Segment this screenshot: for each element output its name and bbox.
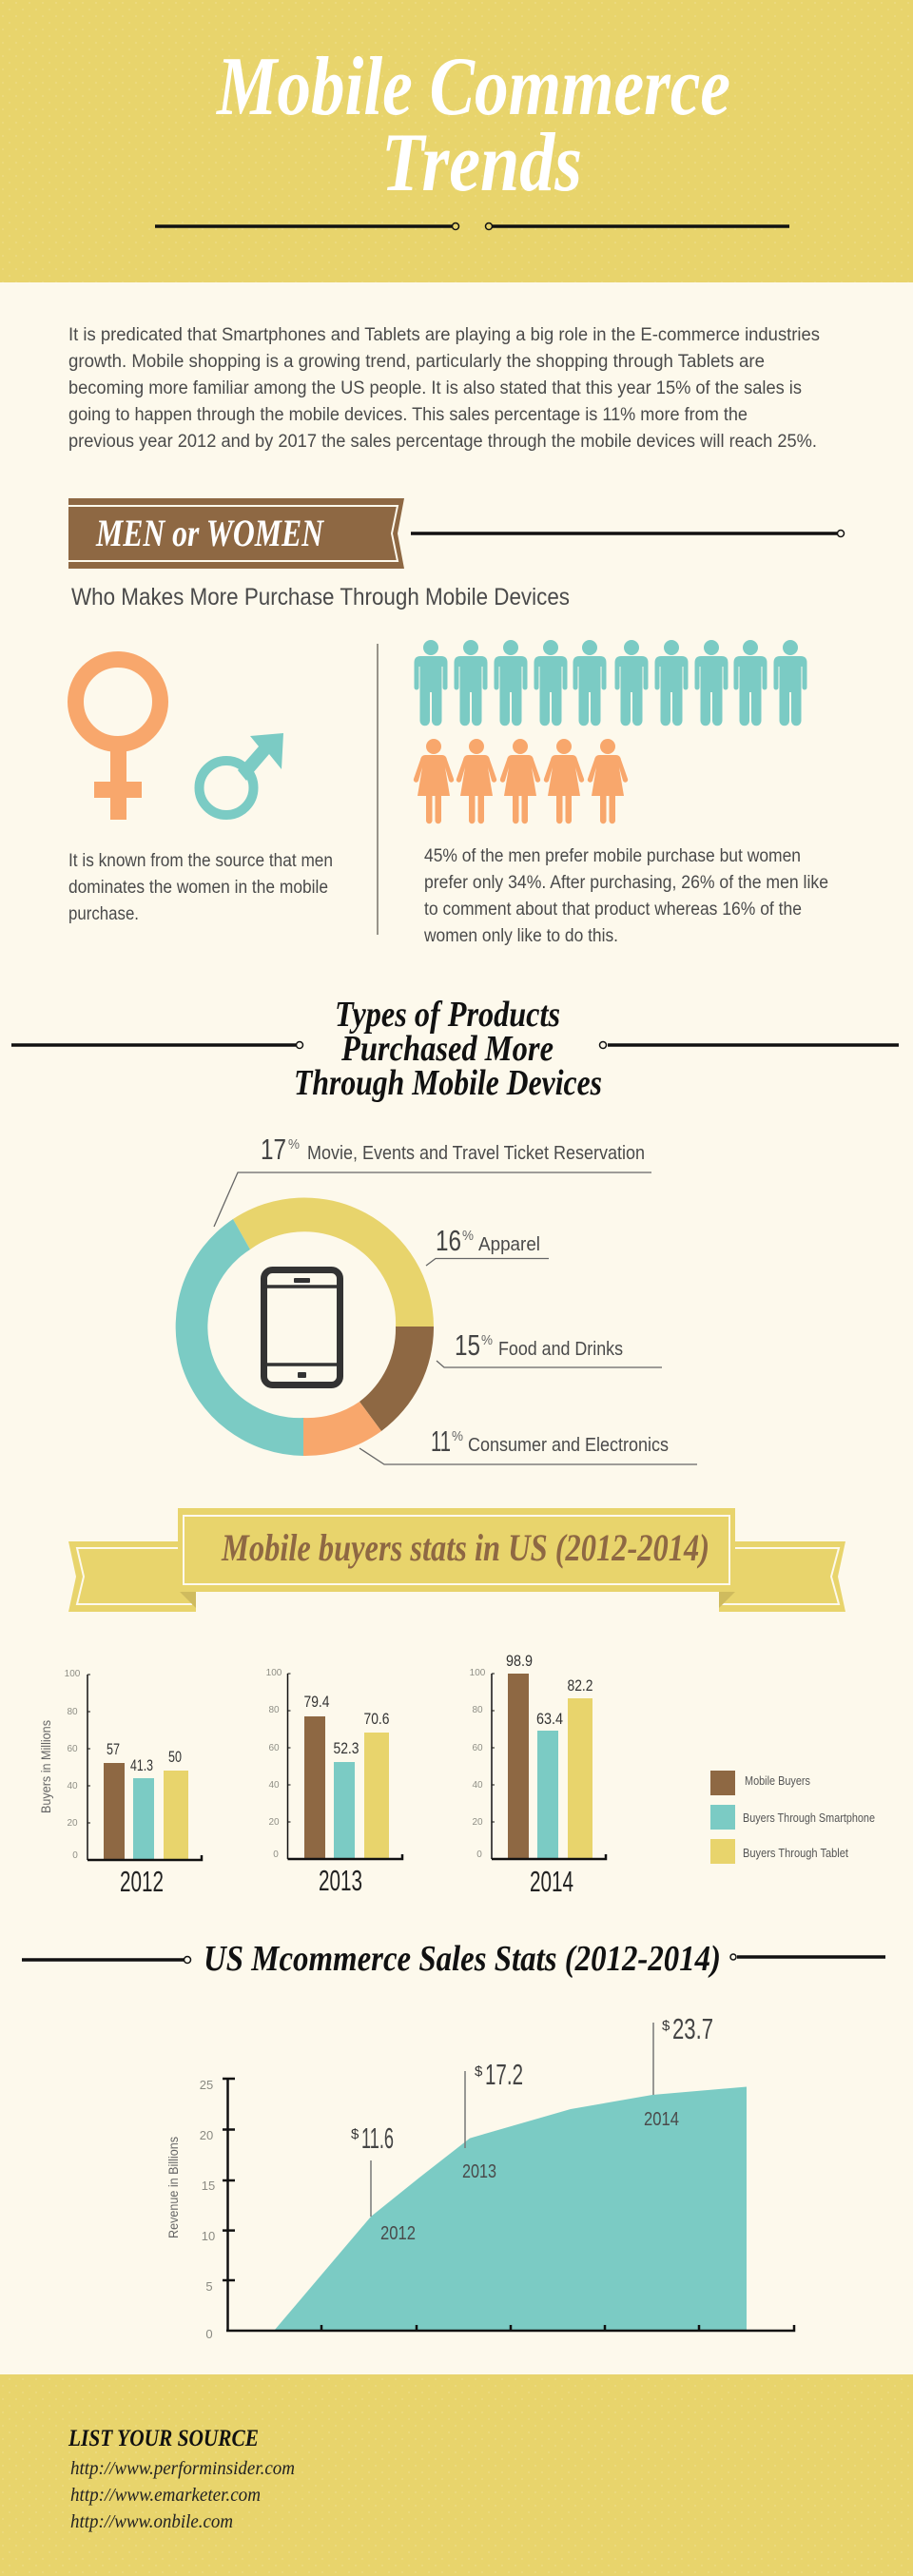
callout: 15 percent: 15	[455, 1328, 480, 1362]
intro paragraph: It is predicated that Smartphones and Tablets are playing a big role in the E-commerce industries	[68, 325, 820, 345]
bar chart: 2014: 82.2	[567, 1676, 593, 1695]
text: men dominate: It is known from the source that men	[68, 851, 333, 871]
area chart: 0	[205, 2327, 213, 2341]
heading dividers	[11, 1042, 899, 1048]
banner: men or women	[68, 498, 404, 569]
callout: 11 percent: 11	[431, 1424, 451, 1458]
text: preference percentages: prefer only 34%. After purchasing, 26% of the men like	[424, 873, 828, 893]
text: preference percentages: 45% of the men prefer mobile purchase but women	[424, 846, 801, 866]
callout: 16 percent: Apparel	[478, 1234, 540, 1255]
callout: 2012 revenue: $	[351, 2126, 359, 2142]
callout: 16 percent: %	[462, 1228, 474, 1244]
heading: types of products	[294, 995, 602, 1103]
bar chart: 2014: 100	[470, 1668, 486, 1678]
intro paragraph: previous year 2012 and by 2017 the sales percentage through the mobile devices will reach 25%.	[68, 432, 817, 452]
bar chart: 2012: 100	[65, 1669, 81, 1679]
callout: 16 percent: 16	[436, 1224, 461, 1257]
panel: us mcommerce sales	[22, 1939, 885, 2341]
bar chart: 2014: 0	[476, 1850, 482, 1860]
axis label: revenue: Revenue in Billions	[165, 2137, 181, 2238]
callout: 11 percent	[359, 1424, 697, 1464]
bar chart: 2012: 2012	[120, 1865, 164, 1898]
header divider	[155, 223, 789, 230]
callout: 2013 revenue: $	[475, 2063, 483, 2080]
callout: 2014 revenue	[644, 2012, 713, 2130]
area chart: 25	[200, 2078, 213, 2092]
icon: men pictogram row	[415, 640, 806, 726]
callout: 2013 revenue: 2013	[462, 2161, 496, 2182]
icon: female symbol	[76, 660, 160, 820]
title	[215, 41, 730, 209]
bar chart: 2013: 52.3	[333, 1739, 359, 1757]
callout: 2012 revenue: 11.6	[361, 2121, 394, 2155]
heading: types of products: Purchased More	[340, 1029, 554, 1069]
bar chart: 2014: 20	[472, 1817, 483, 1828]
heading: sales stats: US Mcommerce Sales Stats (2012-2014)	[204, 1939, 721, 1979]
callout: 2013 revenue: 17.2	[485, 2058, 523, 2091]
callout: 2014 revenue: 2014	[644, 2109, 679, 2130]
source links	[70, 2458, 295, 2532]
subheading: Who Makes More Purchase Through Mobile Devices	[71, 584, 570, 610]
bar chart: 2013: 60	[268, 1743, 280, 1753]
panel: types of products	[11, 995, 899, 1464]
bar chart: 2013: 2013	[319, 1864, 362, 1897]
callout: 17 percent	[214, 1133, 651, 1227]
icon: smartphone	[263, 1270, 340, 1385]
text: preference percentages: women only like to do this.	[423, 926, 618, 946]
text: preference percentages: to comment about that product whereas 16% of the	[424, 900, 802, 920]
callout: 15 percent: Food and Drinks	[498, 1339, 623, 1360]
callout: 15 percent: %	[481, 1332, 493, 1348]
callout: 16 percent	[426, 1224, 549, 1266]
heading: types of products: Through Mobile Devices	[294, 1063, 602, 1103]
banner divider	[411, 531, 845, 536]
area chart: 15	[202, 2179, 215, 2193]
icon: male symbol	[200, 733, 283, 815]
title: Mobile Commerce	[215, 41, 730, 133]
bar chart: 2013: 80	[268, 1705, 280, 1715]
intro paragraph: becoming more familiar among the US people. It is also stated that this year 15% of the sales is	[68, 378, 802, 398]
heading: types of products: Types of Products	[335, 995, 560, 1035]
bar chart: 2012: 40	[67, 1781, 78, 1792]
bar chart: 2012: 80	[67, 1707, 78, 1717]
callout: 17 percent: %	[288, 1136, 300, 1152]
callout: 11 percent: %	[452, 1428, 463, 1444]
bar chart: 2014	[470, 1652, 606, 1898]
panel: header	[0, 0, 913, 282]
bar chart: 2014: 60	[472, 1743, 483, 1753]
ribbon banner	[68, 1508, 845, 1612]
text: men dominate	[68, 851, 333, 924]
legend: Mobile Buyers	[745, 1773, 810, 1788]
area chart: 10	[202, 2229, 215, 2243]
bar chart: 2013: 70.6	[363, 1710, 390, 1728]
legend	[710, 1771, 875, 1864]
callout: 17 percent: 17	[261, 1133, 286, 1166]
area chart: 5	[205, 2279, 213, 2294]
legend: Buyers Through Tablet	[743, 1846, 848, 1860]
heading dividers	[22, 1954, 885, 1963]
intro paragraph: going to happen through the mobile devices. This sales percentage is 11% more from the	[68, 405, 748, 425]
bar chart: 2012: 50	[168, 1748, 182, 1766]
area chart	[165, 2012, 794, 2341]
bar chart: 2014: 98.9	[506, 1652, 533, 1670]
panel: mobile buyers stats	[38, 1508, 875, 1898]
text: men dominate: dominates the women in the mobile	[68, 878, 328, 898]
bar chart: 2012: 41.3	[130, 1756, 153, 1774]
panel: footer sources	[0, 2374, 913, 2576]
heading: list your source: LIST YOUR SOURCE	[68, 2426, 259, 2451]
title: Trends	[381, 117, 582, 209]
intro paragraph	[68, 325, 820, 452]
bar chart: 2014: 63.4	[536, 1710, 563, 1728]
source links: http://www.onbile.com	[70, 2511, 233, 2532]
callout: 2012 revenue	[351, 2121, 416, 2244]
bar chart: 2012: 57	[107, 1740, 120, 1758]
callout: 11 percent: Consumer and Electronics	[468, 1435, 669, 1456]
bar chart: 2013	[266, 1668, 402, 1897]
ribbon banner: Mobile buyers stats in US (2012-2014)	[221, 1526, 709, 1569]
callout: 17 percent: Movie, Events and Travel Ticket Reservation	[307, 1143, 645, 1164]
bar chart: 2014: 2014	[530, 1865, 573, 1898]
bar chart: 2012	[65, 1669, 202, 1898]
callout: 2013 revenue	[462, 2058, 523, 2182]
axis label: buyers in millions: Buyers in Millions	[38, 1720, 53, 1813]
source links: http://www.performinsider.com	[70, 2458, 295, 2479]
bar chart: 2014: 40	[472, 1780, 483, 1791]
bar chart: 2012: 0	[72, 1850, 78, 1861]
bar chart: 2013: 20	[268, 1817, 280, 1828]
callout: 2014 revenue: $	[662, 2018, 670, 2034]
intro paragraph: growth. Mobile shopping is a growing trend, particularly the shopping through Tablets are	[68, 352, 765, 372]
bar chart: 2013: 79.4	[304, 1693, 329, 1711]
text: preference percentages	[423, 846, 828, 946]
area chart: 20	[200, 2128, 213, 2142]
banner: men or women: MEN or WOMEN	[95, 512, 325, 554]
divider: vertical	[377, 644, 379, 935]
bar chart: 2014: 80	[472, 1705, 483, 1715]
bar chart: 2012: 20	[67, 1818, 78, 1829]
icon: women pictogram row	[414, 739, 628, 823]
panel: men or women	[68, 498, 845, 946]
bar chart: 2013: 0	[273, 1850, 279, 1860]
bar chart: 2012: 60	[67, 1744, 78, 1754]
callout: 15 percent	[437, 1328, 662, 1367]
callout: 2014 revenue: 23.7	[672, 2012, 713, 2045]
callout: 2012 revenue: 2012	[380, 2223, 416, 2244]
legend: Buyers Through Smartphone	[743, 1811, 875, 1825]
bar chart: 2013: 100	[266, 1668, 282, 1678]
text: men dominate: purchase.	[68, 904, 139, 924]
bar chart: 2013: 40	[268, 1780, 280, 1791]
donut chart	[176, 1197, 434, 1456]
source links: http://www.emarketer.com	[70, 2485, 261, 2506]
